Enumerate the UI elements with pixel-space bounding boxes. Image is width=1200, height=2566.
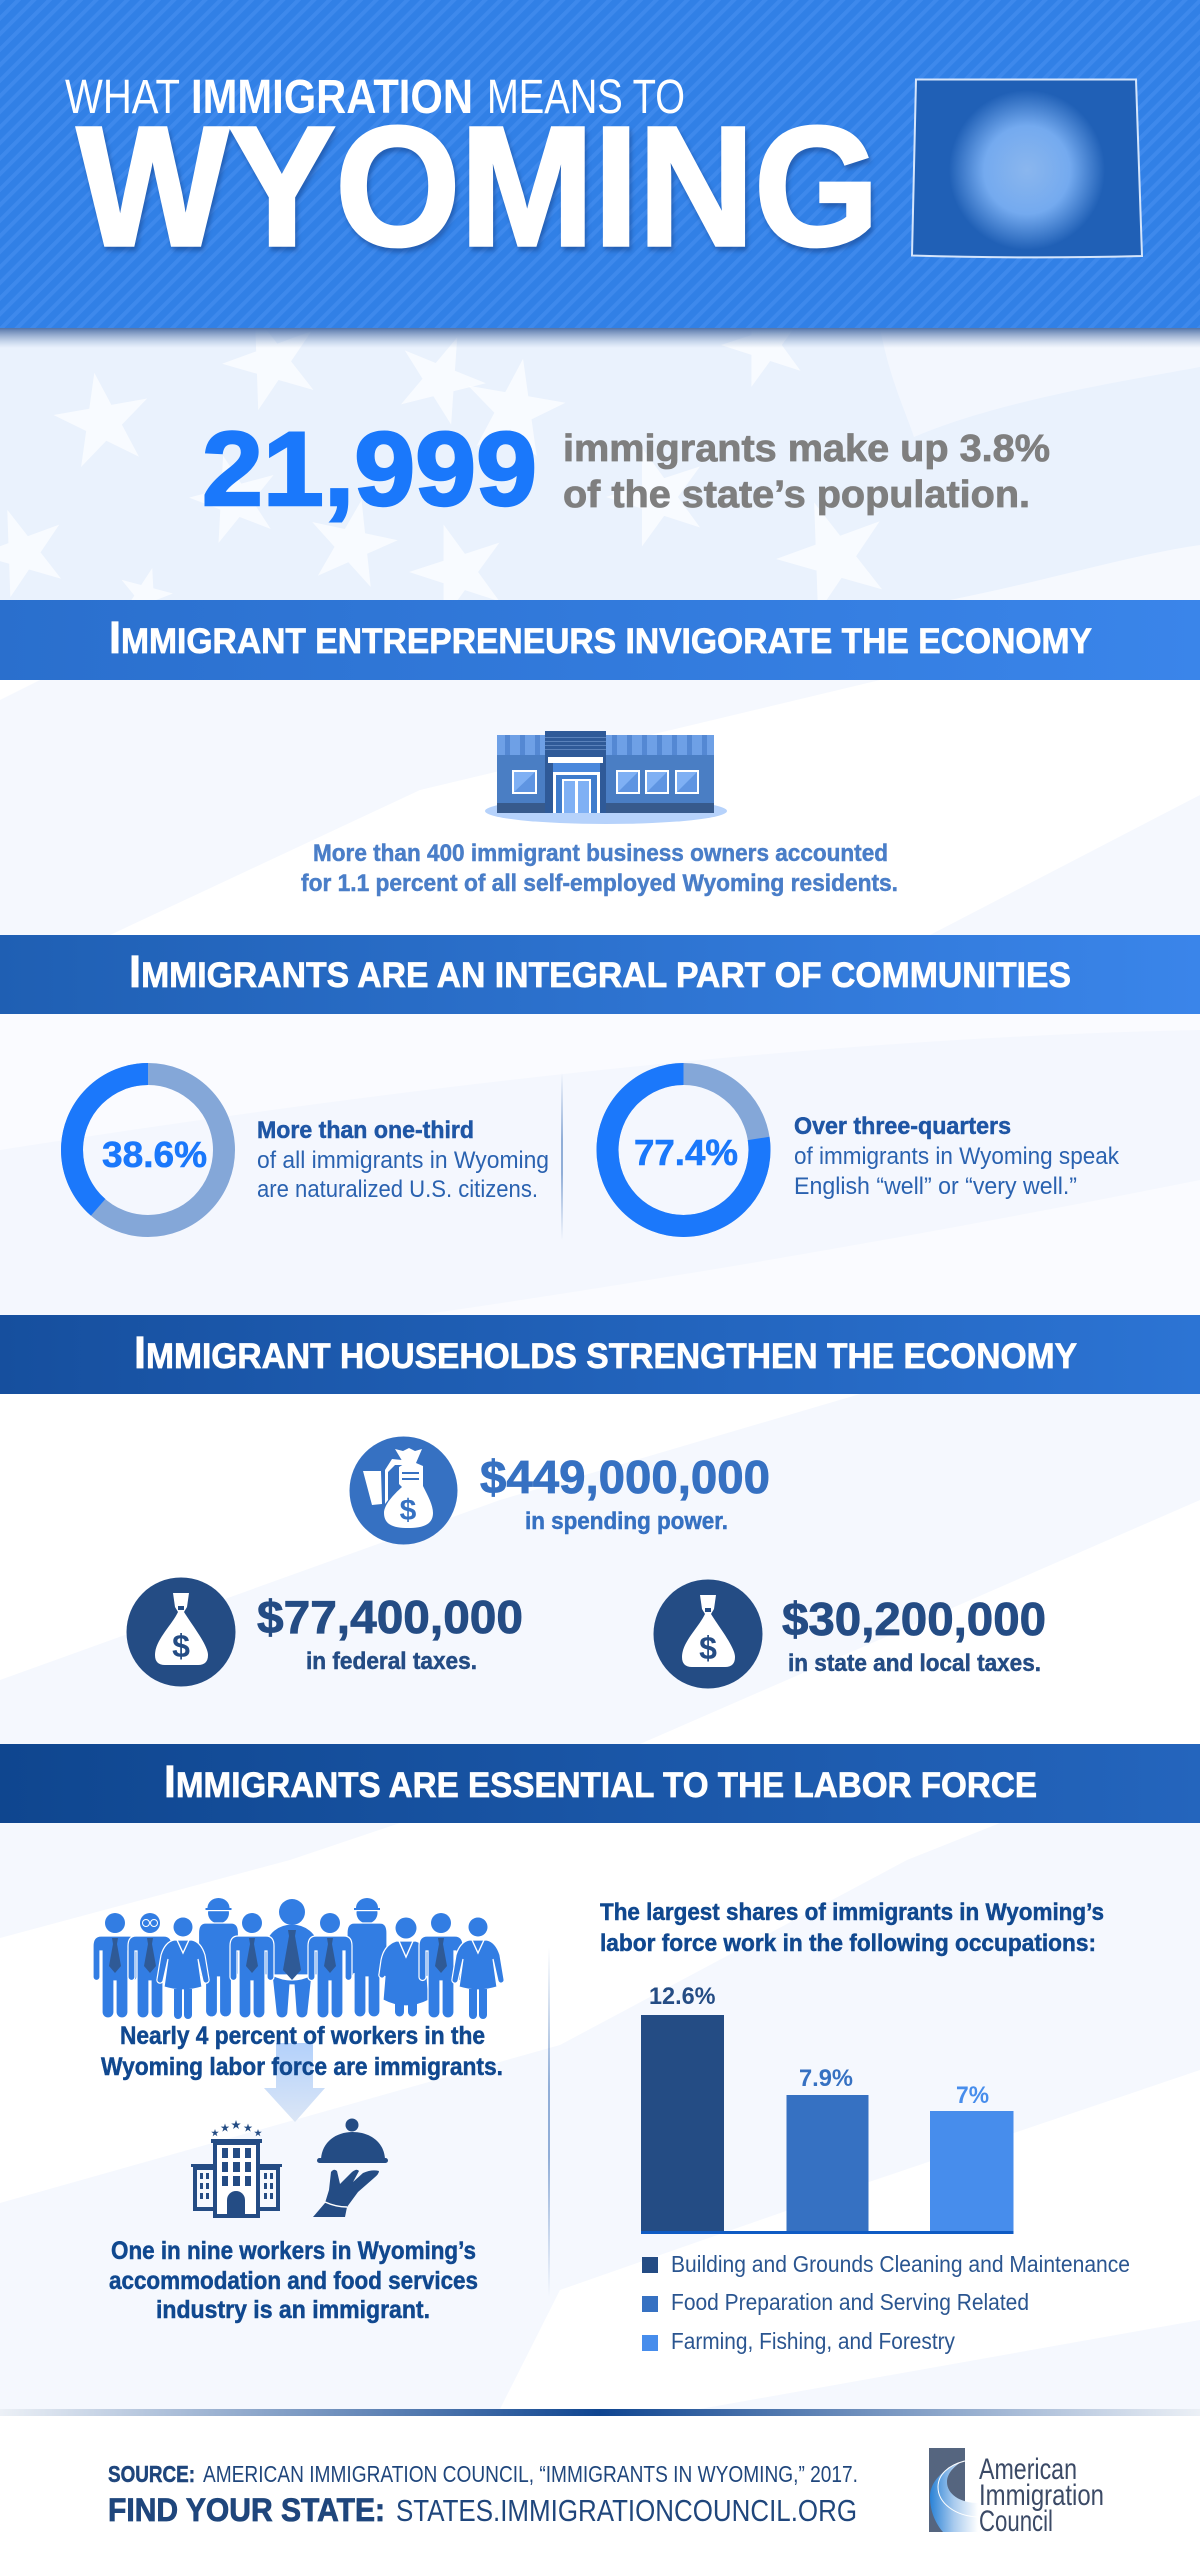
logo: American Immigration Council: Immigration [979,2479,1104,2512]
stat: federal taxes [257,1591,523,1675]
text: naturalized citizens: More than one-third [257,1117,474,1144]
section heading: households [0,1315,1200,1394]
footer source [108,2461,858,2528]
chart heading [600,1899,1104,1957]
title line: IMMIGRATION [191,71,473,124]
icon: group of workers [93,1898,504,2019]
section heading: labor force [0,1744,1200,1823]
header shadow [0,328,1200,348]
header banner [0,0,1200,348]
footer source: FIND YOUR STATE: [108,2492,385,2528]
arrow: down [264,2043,325,2122]
stat: federal taxes: in federal taxes. [306,1648,477,1675]
legend: Farming, Fishing, and Forestry [671,2328,955,2354]
section heading: communities [0,935,1200,1014]
text: naturalized citizens: are naturalized U.S. citizens. [257,1176,538,1203]
text: naturalized citizens [257,1117,549,1203]
section heading: entrepreneurs [0,600,1200,680]
text: business owners: for 1.1 percent of all self-employed Wyoming residents. [301,870,898,897]
text: accommodation and food services: accommodation and food services [109,2267,478,2295]
text: naturalized citizens: of all immigrants in Wyoming [257,1147,549,1174]
state shape: Wyoming map [912,80,1142,257]
background: flag with stars [0,290,1200,625]
text: English proficiency: of immigrants in Wyoming speak [794,1143,1120,1170]
stat: state and local taxes: in state and local taxes. [788,1650,1041,1677]
icon: money bag state [654,1580,762,1688]
stat: 21,999 immigrants [202,411,1050,528]
stat: state and local taxes [782,1593,1046,1677]
footer source: AMERICAN IMMIGRATION COUNCIL, “IMMIGRANTS IN WYOMING,” 2017. [203,2461,858,2487]
bar chart: occupations: 7.9% [799,2065,853,2092]
stat: spending power: in spending power. [525,1508,728,1535]
text: 4 percent of workers [101,2022,503,2081]
text: accommodation and food services [109,2237,478,2324]
icon: money bag state: $ [699,1630,717,1666]
donut chart: 38.6%: 38.6% [102,1134,207,1175]
legend: Food Preparation and Serving Related [671,2289,1029,2315]
legend [642,2251,1130,2354]
text: accommodation and food services: One in nine workers in Wyoming’s [111,2237,476,2265]
title line: WHAT [65,71,180,124]
background: pale waves [0,680,1200,2566]
icon: storefront [485,731,727,824]
footer source: STATES.IMMIGRATIONCOUNCIL.ORG [396,2493,857,2528]
text: 4 percent of workers: Nearly 4 percent of workers in the [120,2022,485,2050]
logo: American Immigration Council [929,2448,1104,2538]
section heading: labor force: IMMIGRANTS ARE ESSENTIAL TO THE LABOR FORCE [164,1756,1037,1807]
logo: American Immigration Council: American [979,2453,1077,2486]
stat: federal taxes: $77,400,000 [257,1591,523,1643]
text: English proficiency [794,1113,1120,1200]
stat: 21,999 immigrants: 21,999 [202,411,537,528]
text: business owners [301,840,898,897]
text: 4 percent of workers: Wyoming labor force are immigrants. [101,2053,503,2081]
icon: hotel [191,2120,282,2218]
title: Wyoming: WYOMING [77,92,879,282]
donut chart: 77.4%: 77.4% [634,1132,738,1173]
chart heading: labor force work in the following occupations: [600,1930,1096,1957]
stat: 21,999 immigrants: of the state’s population. [563,474,1030,516]
donut chart: 38.6% [72,1074,224,1226]
title line: MEANS TO [487,71,685,124]
icon: serving cloche on hand [313,2118,388,2217]
footer source: SOURCE: [108,2461,195,2487]
logo: American Immigration Council: Council [979,2505,1053,2538]
text: accommodation and food services: industry is an immigrant. [156,2296,430,2324]
bar chart: occupations: 12.6% [649,1983,716,2010]
donut chart: 77.4% [608,1074,760,1226]
text: English proficiency: Over three-quarters [794,1113,1011,1140]
bar chart: occupations: 7% [956,2082,989,2109]
stat: spending power: $449,000,000 [480,1451,770,1503]
text: business owners: More than 400 immigrant business owners accounted [313,840,888,867]
section heading: communities: IMMIGRANTS ARE AN INTEGRAL PART OF COMMUNITIES [129,946,1071,997]
legend: Building and Grounds Cleaning and Maintenance [671,2251,1130,2277]
icon: hand holding money bag: $ [400,1494,417,1527]
section heading: households: IMMIGRANT HOUSEHOLDS STRENGTHEN THE ECONOMY [134,1327,1077,1378]
stat: 21,999 immigrants: immigrants make up 3.8% [563,428,1050,470]
bar chart: occupations [641,1983,1014,2234]
title line [65,71,685,124]
icon: money bag federal: $ [172,1628,190,1664]
stat: spending power [480,1451,770,1535]
icon: hand holding money bag [350,1436,458,1544]
text: English proficiency: English “well” or “very well.” [794,1173,1077,1200]
section heading: entrepreneurs: IMMIGRANT ENTREPRENEURS INVIGORATE THE ECONOMY [109,612,1092,663]
icon: money bag federal [126,1578,236,1686]
stat: state and local taxes: $30,200,000 [782,1593,1046,1645]
chart heading: The largest shares of immigrants in Wyoming’s [600,1899,1104,1926]
